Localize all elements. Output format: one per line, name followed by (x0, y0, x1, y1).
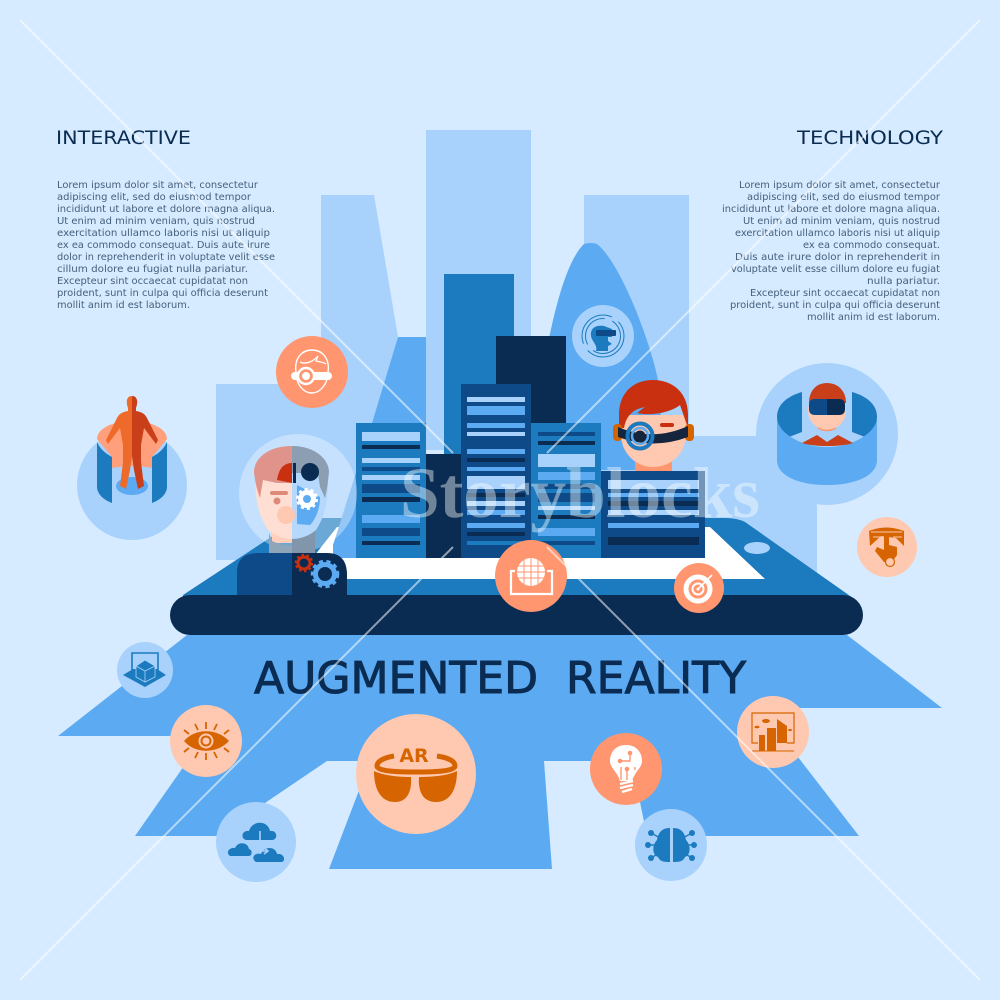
icon: cube (117, 642, 173, 698)
face (256, 470, 292, 539)
icon: VR cylinder person (756, 363, 898, 505)
heading: technology: TECHNOLOGY (796, 127, 943, 149)
city buildings (356, 274, 601, 558)
icon: brain (635, 809, 707, 881)
icon: globe in frame (495, 540, 567, 612)
tablet (183, 423, 853, 600)
right body text: nulla pariatur. (867, 276, 940, 287)
right body text: Ut enim ad minim veniam, quis nostrud (743, 216, 940, 227)
building 4 (601, 471, 705, 558)
left body text: ex ea commodo consequat. Duis aute irure (57, 240, 270, 251)
left body text: mollit anim id est laborum. (57, 300, 190, 311)
building 2 (461, 384, 531, 558)
left body text: Excepteur sint occaecat cupidatat non (57, 276, 248, 287)
left body text: proident, sunt in culpa qui officia deserunt (57, 288, 268, 299)
watermark disc (239, 434, 357, 552)
base bar (170, 595, 863, 635)
left body text: dolor in reprehenderit in voluptate velit esse (57, 252, 275, 263)
face details (270, 491, 288, 495)
right body text: incididunt ut labore et dolore magna aliqua. (722, 204, 940, 215)
left body text (57, 180, 275, 311)
left body text: Ut enim ad minim veniam, quis nostrud (57, 216, 255, 227)
icon: eye (170, 705, 242, 777)
right body text: Lorem ipsum dolor sit amet, consectetur (739, 180, 941, 191)
right body text: exercitation ullamco laboris nisi ut aliquip (735, 228, 940, 239)
right body text: ex ea commodo consequat. (803, 240, 940, 251)
body (237, 553, 292, 595)
person with VR visor (613, 380, 694, 475)
hair (254, 446, 292, 498)
watermark: Storyblocks (400, 453, 760, 533)
right body text: Excepteur sint occaecat cupidatat non (750, 288, 940, 299)
right body text: Duis aute irure dolor in reprehenderit in (735, 252, 940, 263)
right body text: voluptate velit esse cillum dolore eu fugiat (731, 264, 940, 275)
ground shape (58, 635, 942, 869)
left body text: adipiscing elit, sed do eiusmod tempor (57, 192, 252, 203)
right body text: mollit anim id est laborum. (807, 312, 940, 323)
right body text: adipiscing elit, sed do eiusmod tempor (747, 192, 941, 203)
right body text (722, 180, 941, 323)
right body text: proident, sunt in culpa qui officia deserunt (730, 300, 940, 311)
gears (300, 492, 314, 506)
icon: hand gesture (857, 517, 917, 577)
half human half machine person (237, 446, 347, 595)
icon: VR head (572, 305, 634, 367)
building 1 (356, 423, 426, 558)
icon: AR glasses (356, 714, 476, 834)
icon: bulb (590, 733, 662, 805)
icon: target (674, 563, 724, 613)
icon: clouds (216, 802, 296, 882)
left body text: exercitation ullamco laboris nisi ut aliquip (57, 228, 270, 239)
left body text: Lorem ipsum dolor sit amet, consectetur (57, 180, 259, 191)
left body text: incididunt ut labore et dolore magna aliqua. (57, 204, 275, 215)
title: AUGMENTED REALITY (254, 653, 746, 704)
building 3 (531, 423, 601, 558)
icon: AR glasses: AR (399, 745, 429, 767)
skyline silhouettes (216, 130, 817, 575)
icon: human hologram (77, 396, 187, 540)
heading: interactive: INTERACTIVE (56, 127, 191, 149)
icon: face with visor (276, 336, 348, 408)
icon: city chart (737, 696, 809, 768)
left body text: cillum dolore eu fugiat nulla pariatur. (57, 264, 248, 275)
